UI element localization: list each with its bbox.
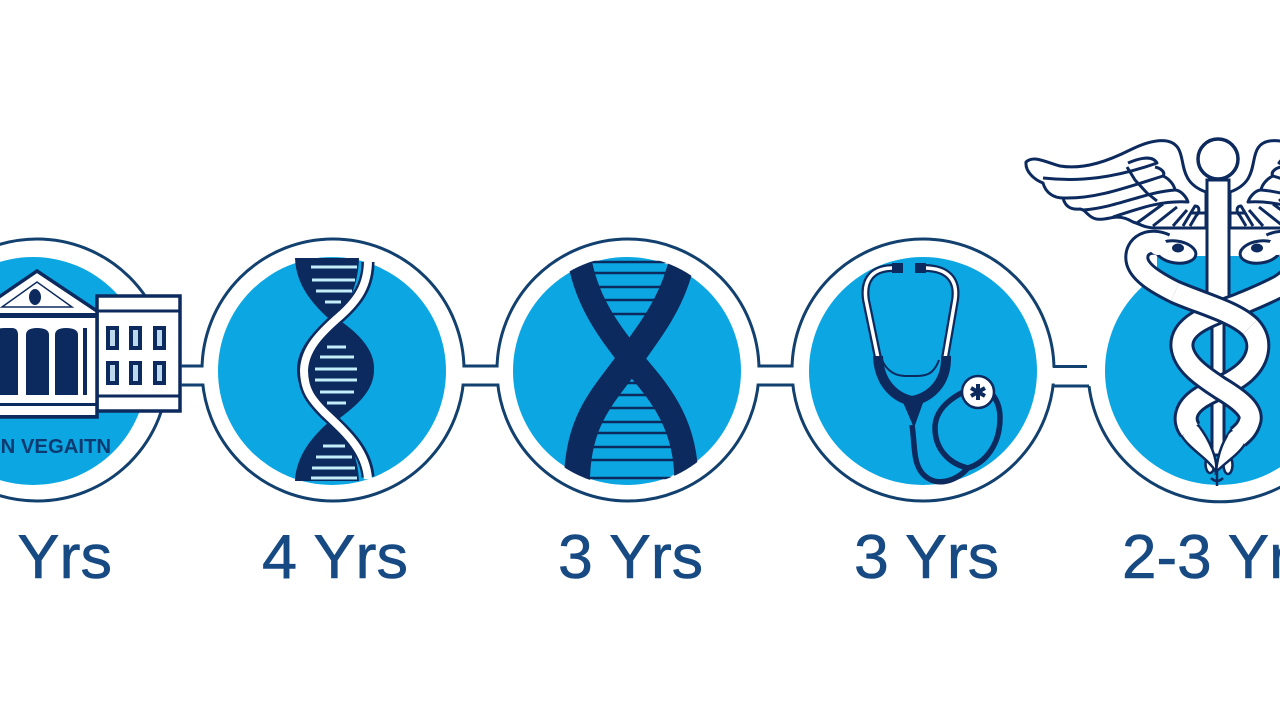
- ring 4 gaps: [788, 368, 1058, 384]
- snake tails: [1181, 425, 1245, 486]
- ring 2: [202, 239, 464, 501]
- ring 5 lower arc: [1089, 386, 1280, 502]
- snake heads: [1149, 237, 1280, 266]
- step 4: stethoscope: [788, 239, 1058, 501]
- icon: university building: [0, 271, 180, 418]
- blue disc 3: [513, 257, 741, 485]
- left wing: [1026, 141, 1206, 228]
- connector 2-3: [463, 366, 498, 385]
- snake crossing: [1175, 292, 1250, 327]
- blue disc 2: [218, 257, 446, 485]
- snake tail joints: [1184, 424, 1244, 448]
- icon: caduceus: [1026, 139, 1280, 486]
- connector 3-4: [758, 366, 793, 385]
- label: 4 Yrs: 4 Yrs: [262, 523, 408, 592]
- icon: DNA double helix: [295, 258, 374, 481]
- step 5: caduceus: [1026, 139, 1280, 502]
- right wing: [1230, 141, 1280, 228]
- blue disc 1: [0, 257, 147, 485]
- blue area between snake heads: [1157, 256, 1280, 295]
- ring 1: [0, 239, 168, 501]
- staff: [1207, 180, 1229, 455]
- label: 3 Yrs: 3 Yrs: [558, 523, 703, 592]
- ring 3: [497, 239, 759, 501]
- icon: stethoscope: [865, 263, 1000, 482]
- step 2: DNA helix: [198, 239, 468, 501]
- step 1: university: [0, 239, 180, 501]
- connector 4-5: [1053, 366, 1089, 386]
- snake A: [1137, 242, 1258, 430]
- ring 4: [792, 239, 1054, 501]
- blue disc 4: [809, 257, 1037, 485]
- connector 1-2: [181, 366, 203, 385]
- ring 3 gaps: [493, 368, 763, 384]
- icon: DNA strands: [577, 250, 686, 490]
- snake B: [1182, 242, 1280, 437]
- blue disc 5: [1105, 257, 1280, 485]
- label: 3 Yrs: 3 Yrs: [854, 523, 999, 592]
- ring 2 gaps: [198, 368, 468, 384]
- step 3: large DNA: [493, 239, 763, 501]
- orb: [1198, 139, 1238, 179]
